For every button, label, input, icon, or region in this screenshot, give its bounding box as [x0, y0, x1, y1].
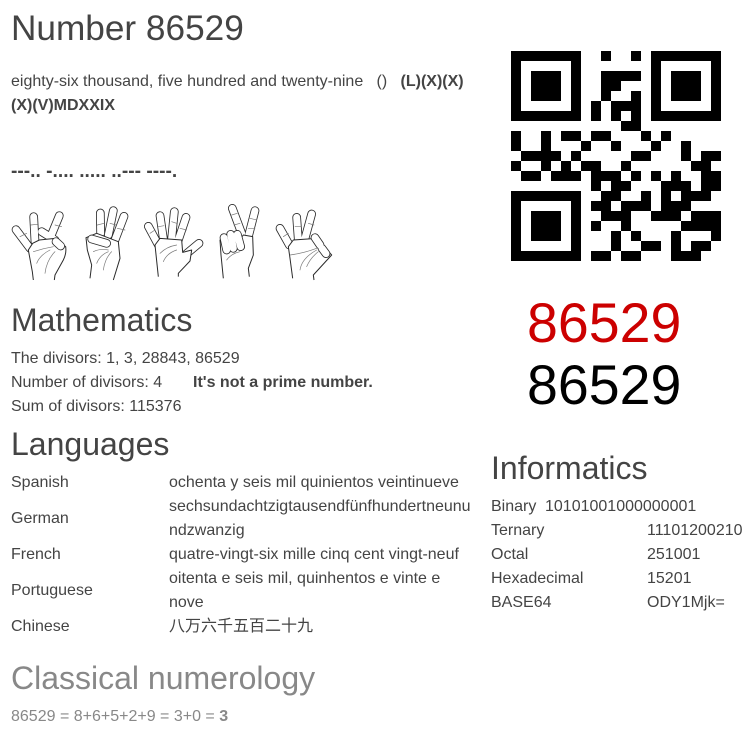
icon: QR code: [511, 51, 721, 261]
title: Number 86529: [11, 9, 244, 48]
informatics table: BASE64: [491, 594, 551, 611]
heading: mathematics: Mathematics: [11, 302, 192, 338]
languages table: [11, 474, 471, 635]
languages table: quatre-vingt-six mille cinq cent vingt-neuf: [169, 546, 459, 563]
languages table: sechsundachtzigtausendfünfhundertneunu: [169, 498, 471, 515]
icon: sign language hands: [12, 204, 332, 280]
numerology sum: 86529 = 8+6+5+2+9 = 3+0 = 3: [11, 708, 228, 725]
languages table: nove: [169, 594, 204, 611]
languages table: French: [11, 546, 61, 563]
informatics table: 10101001000000001: [545, 498, 696, 515]
mathematics text: Sum of divisors: 115376: [11, 398, 181, 415]
informatics table: 11101200210: [647, 522, 743, 539]
languages table: Chinese: [11, 618, 70, 635]
mathematics text: [11, 350, 373, 415]
heading: informatics: Informatics: [491, 450, 647, 486]
mathematics text: It's not a prime number.: [193, 374, 373, 391]
informatics table: Octal: [491, 546, 528, 563]
heading: languages: Languages: [11, 426, 169, 462]
black number: 86529: [527, 354, 681, 416]
morse code: ---.. -.... ..... ..--- ----.: [11, 161, 177, 182]
informatics table: 251001: [647, 546, 700, 563]
informatics table: Ternary: [491, 522, 544, 539]
number in words and roman numeral: (X)(V)MDXXIX: [11, 97, 115, 114]
number in words and roman numeral: eighty-six thousand, five hundred and twenty-nine () (L)(X)(X): [11, 73, 464, 90]
languages table: Spanish: [11, 474, 69, 491]
mathematics text: The divisors: 1, 3, 28843, 86529: [11, 350, 240, 367]
heading: classical numerology: Classical numerology: [11, 660, 315, 696]
mathematics text: Number of divisors: 4: [11, 374, 162, 391]
languages table: ochenta y seis mil quinientos veintinueve: [169, 474, 459, 491]
number in words and roman numeral: [11, 73, 464, 114]
informatics table: [491, 498, 743, 611]
informatics table: 15201: [647, 570, 692, 587]
languages table: 八万六千五百二十九: [169, 618, 313, 635]
languages table: ndzwanzig: [169, 522, 245, 539]
informatics table: Binary: [491, 498, 536, 515]
informatics table: Hexadecimal: [491, 570, 583, 587]
languages table: German: [11, 510, 69, 527]
languages table: oitenta e seis mil, quinhentos e vinte e: [169, 570, 440, 587]
languages table: Portuguese: [11, 582, 93, 599]
informatics table: ODY1Mjk=: [647, 594, 725, 611]
red number: 86529: [527, 292, 681, 354]
